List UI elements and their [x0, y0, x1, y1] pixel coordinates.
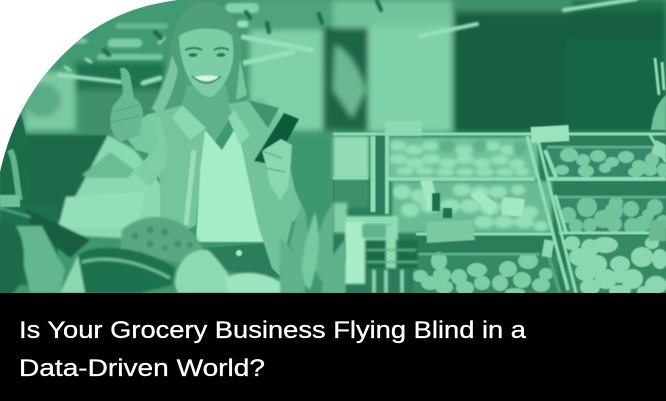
- ground behind produce: [60, 253, 87, 293]
- face: [179, 28, 233, 97]
- stalks held in basket: [78, 248, 175, 293]
- title: Is Your Grocery Business Flying Blind in a: [19, 317, 527, 344]
- right crates: [548, 147, 666, 177]
- title: [19, 317, 527, 382]
- bottom centre crate: [413, 255, 558, 293]
- ceiling lights: [59, 0, 636, 83]
- black title band: [0, 293, 666, 401]
- title: Data-Driven World?: [19, 355, 265, 382]
- hand holding phone: [262, 139, 292, 200]
- denim jacket: [148, 106, 205, 230]
- neck: [182, 85, 232, 142]
- blurred left and centre crates: [333, 136, 552, 233]
- crate price signs: [385, 121, 422, 136]
- broccoli: [120, 217, 203, 263]
- duotone store photo: [0, 0, 666, 297]
- smartphone: [254, 113, 299, 165]
- chrome basket edge: [0, 112, 26, 208]
- foreground tablet and produce: [0, 205, 345, 296]
- store background: ceiling and walls: [0, 0, 666, 135]
- dark counter and glass display: [0, 135, 165, 285]
- cauliflower: [175, 250, 240, 293]
- white shirt: [196, 130, 264, 243]
- ceiling fixtures: [104, 1, 381, 55]
- melon: [225, 273, 292, 293]
- extended arm sleeve: [133, 114, 168, 187]
- woman holding phone, thumbs up: [110, 2, 306, 282]
- packaged goods: [333, 216, 418, 293]
- crate rails: [333, 134, 666, 293]
- right side produce shelves: [333, 58, 666, 297]
- forearm and fist: [128, 115, 149, 154]
- pineapple leaves: [280, 205, 345, 293]
- hair: [150, 2, 250, 118]
- far right pineapple: [651, 58, 666, 130]
- jeans: [204, 243, 280, 277]
